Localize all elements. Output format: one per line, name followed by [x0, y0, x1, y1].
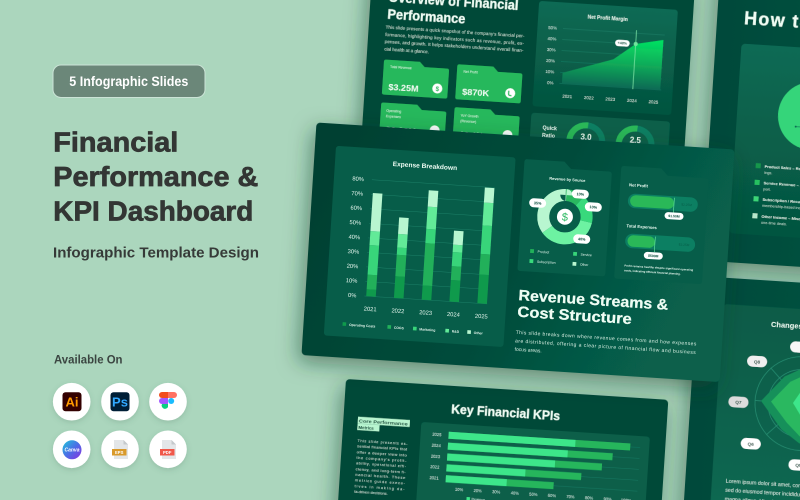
main title: Financial — [53, 126, 178, 157]
main title — [53, 126, 258, 227]
card: total revenue: $3.25M — [388, 83, 419, 94]
panel: net profit margin chart: 10% — [545, 69, 554, 75]
badge: 5 infographic slides: 5 Infographic Slides — [69, 74, 188, 89]
kpi paragraph: ciency, and long-term fi- — [356, 466, 406, 474]
card: operating expenses — [379, 102, 447, 142]
panel: quick ratio gauges: Quick — [542, 125, 557, 132]
card: total revenue: Total Revenue — [390, 65, 412, 70]
donut chart: 40% — [578, 237, 586, 242]
card: net profit — [455, 64, 523, 103]
icon: canva: Canva — [64, 448, 80, 454]
card: yoy growth: (Revenue) — [460, 119, 476, 124]
panel: net profit margin chart — [532, 1, 678, 115]
pie chart — [776, 80, 800, 152]
panel: stacked bar chart of kpis: 40% — [511, 490, 519, 496]
panel: expense breakdown bar chart: 70% — [351, 191, 363, 198]
card: yoy growth — [452, 107, 520, 146]
panel: expense breakdown bar chart: 2021 — [363, 307, 377, 313]
donut chart — [527, 186, 603, 245]
donut chart: $ — [561, 212, 568, 224]
panel: stacked bar chart of kpis: 70% — [566, 494, 575, 500]
panel: stacked bar chart of kpis: 20% — [473, 488, 482, 494]
kpi paragraph — [354, 438, 409, 497]
panel: stacked bar chart of kpis — [414, 422, 650, 500]
donut legend: Subscription — [537, 260, 556, 265]
donut legend — [529, 249, 592, 267]
slide heading: revenue streams and cost structure: Revenue Streams & — [518, 287, 669, 314]
panel: expense breakdown bar chart: 2025 — [475, 314, 488, 321]
panel: expense breakdown bar chart: 0% — [348, 293, 357, 299]
badge: 5 infographic slides — [53, 65, 205, 98]
highlighted subheading: core performance metrics: Core Performance — [359, 418, 409, 426]
panel: stacked bar chart of kpis: 2021 — [429, 475, 440, 481]
panel: net profit and total expenses — [614, 166, 709, 284]
icon: canva — [53, 430, 90, 468]
panel: expense breakdown bar chart: Expense Breakdown — [392, 161, 457, 172]
panel: stacked bar chart of kpis: 2025 — [432, 432, 442, 437]
panel: net profit and total expenses: Total Expenses — [626, 223, 658, 230]
panel: expense breakdown bar chart: 30% — [347, 249, 359, 256]
radar axis labels: Q8 — [754, 359, 761, 364]
panel: revenue by source donut — [517, 159, 612, 276]
overview paragraph: This slide presents a quick snapshot of the company's financial per- — [386, 25, 525, 39]
pie legend: ings. — [764, 171, 772, 176]
expense legend: Marketing — [419, 327, 435, 332]
bar 2023 — [422, 190, 438, 300]
panel: net profit margin chart: 2024 — [627, 98, 637, 103]
panel: expense breakdown bar chart: 2022 — [391, 308, 404, 315]
panel: expense breakdown bar chart: 10% — [346, 278, 357, 285]
donut chart: 10% — [589, 205, 598, 210]
donut chart: 35% — [534, 201, 542, 206]
overview paragraph: penses, and growth. It helps stakeholders understand overall finan- — [385, 39, 524, 53]
revenue paragraph — [514, 330, 697, 364]
panel: expense breakdown bar chart: 50% — [349, 220, 361, 227]
card: operating expenses: Operating — [386, 109, 401, 114]
panel: net profit margin chart: 20% — [546, 58, 555, 64]
slide: revenue streams and cost structure — [301, 122, 735, 382]
overview paragraph — [384, 25, 525, 60]
pie legend — [752, 163, 800, 230]
panel: net profit margin chart: Net Profit Margin — [587, 15, 628, 23]
panel: pie and legend — [729, 44, 800, 245]
panel: net profit and total expenses: $2.25M — [681, 203, 692, 207]
card: net profit: Net Profit — [463, 70, 478, 75]
icon: illustrator: Ai — [66, 394, 78, 410]
expense legend — [342, 322, 484, 336]
panel: stacked bar chart of kpis: 50% — [529, 492, 538, 497]
radar axis labels: Q6 — [748, 441, 754, 447]
slide heading: overview: Performance — [387, 5, 466, 26]
kpi paragraph: metrics guide execu- — [355, 477, 406, 486]
highlighted subheading: core performance metrics: Metrics — [358, 425, 374, 431]
slide heading: revenue streams and cost structure: Cost Structure — [517, 304, 632, 328]
panel: stacked bar chart of kpis: 60% — [548, 493, 557, 498]
card: operating expenses: $2.38M — [385, 126, 416, 137]
revenue paragraph: are distributed, offering a clear picture of financial flow and business — [515, 338, 696, 356]
panel: net profit margin chart: 40% — [547, 36, 557, 42]
panel: net profit margin chart: 0% — [547, 80, 554, 85]
icon: photoshop: Ps — [112, 394, 128, 410]
slide heading: key financial kpis: Key Financial KPIs — [451, 401, 561, 423]
panel: expense breakdown bar chart: 2024 — [447, 312, 461, 319]
bar 2025 — [477, 187, 494, 304]
panel: net profit margin chart: 2022 — [584, 95, 594, 101]
panel: radar chart — [707, 304, 800, 500]
panel: net profit margin chart: 2023 — [605, 96, 616, 102]
card: yoy growth: 12.4% — [459, 131, 484, 141]
panel: expense breakdown bar chart: 40% — [348, 235, 360, 241]
panel: expense breakdown bar chart — [324, 146, 516, 347]
kpi paragraph: This slide presents es- — [357, 438, 408, 446]
kpi paragraph: tives in making da- — [354, 483, 405, 491]
icon: pdf file — [149, 430, 187, 468]
expense legend: Operating Costs — [349, 323, 376, 329]
slide: how to revenue breakdown — [701, 0, 800, 274]
panel: revenue by source donut: Revenue by Source — [549, 176, 586, 183]
slide: changes radar chart — [679, 276, 800, 500]
panel: net profit and total expenses: $2.25M — [679, 243, 690, 247]
panel: net profit margin chart: 50% — [548, 25, 557, 31]
donut legend: Product — [537, 250, 549, 254]
panel: stacked bar chart of kpis: 2024 — [431, 443, 442, 448]
pie legend: one-time deals. — [761, 221, 787, 226]
panel: expense breakdown bar chart: 20% — [346, 264, 358, 270]
radar paragraph — [724, 479, 800, 500]
subtitle: Infographic Template Design — [53, 244, 259, 261]
icon: pdf file: PDF — [163, 450, 172, 455]
panel: stacked bar chart of kpis: 2023 — [431, 453, 441, 459]
panel: stacked bar chart of kpis: 30% — [492, 489, 501, 495]
panel: net profit and total expenses: $500M — [648, 254, 659, 258]
panel: net profit margin chart: 30% — [547, 47, 556, 53]
bar 2022 — [394, 217, 409, 298]
highlighted subheading: core performance metrics — [357, 417, 410, 433]
slide: overview of financial performance — [360, 0, 695, 181]
panel: expense breakdown bar chart: 80% — [352, 176, 364, 183]
panel: net profit margin chart: 2021 — [562, 94, 573, 99]
donut chart: 10% — [576, 192, 585, 197]
bar 2021 — [366, 193, 382, 297]
slide heading: overview — [387, 0, 519, 30]
panel: net profit margin chart: +48% — [618, 41, 628, 46]
panel: stacked bar chart of kpis: 10% — [455, 487, 464, 492]
icon: figma — [149, 383, 187, 421]
kpi paragraph: ta-driven decisions. — [354, 489, 388, 496]
kpi paragraph: offer a deeper view into — [357, 449, 407, 457]
icon: photoshop — [101, 383, 139, 421]
panel: quick ratio gauges: 2.5 — [629, 136, 642, 145]
panel: net profit margin chart: 2025 — [648, 99, 659, 105]
donut legend: Service — [580, 253, 592, 257]
card: operating expenses: Expenses — [386, 114, 401, 119]
revenue paragraph: focus areas. — [514, 347, 542, 355]
slide heading: revenue streams and cost structure — [517, 287, 669, 330]
panel: net profit and total expenses: $1.50M — [668, 214, 680, 219]
panel: quick ratio gauges: Ratio — [542, 133, 555, 140]
card: net profit: $870K — [462, 88, 490, 99]
expense legend: R&D — [452, 329, 460, 334]
radar axis labels — [724, 337, 800, 471]
revenue paragraph: This slide breaks down where revenue comes from and how expenses — [515, 330, 697, 347]
icon: illustrator — [53, 383, 90, 421]
panel: expense breakdown bar chart: 2023 — [419, 310, 432, 317]
kpi paragraph: the company's profit- — [356, 455, 407, 463]
card: total revenue — [382, 60, 449, 99]
card: yoy growth: YoY Growth — [461, 114, 479, 119]
main title: KPI Dashboard — [53, 196, 253, 227]
kpi paragraph: nancial health. These — [355, 472, 405, 480]
icon: eps file: EPS — [115, 450, 124, 455]
pie legend: port. — [763, 187, 771, 192]
slide: key financial kpis — [333, 379, 668, 500]
kpi paragraph: ability, operational effi- — [356, 461, 407, 469]
kpi paragraph: sential financial KPIs that — [357, 444, 408, 452]
main title: Performance & — [53, 161, 258, 192]
panel: net profit and total expenses: Profit remains healthy despite significant operating — [624, 263, 694, 272]
radar axis labels: Q7 — [735, 400, 742, 405]
expense legend: COGS — [394, 326, 405, 330]
bar 2024 — [449, 231, 464, 302]
overview paragraph: formance, highlighting key indicators such as revenue, profit, ex- — [385, 32, 525, 46]
panel: net profit and total expenses: Net Profit — [629, 182, 649, 189]
overview paragraph: cial health at a glance. — [384, 46, 429, 54]
donut legend: Other — [580, 262, 589, 267]
expense legend: Other — [474, 331, 484, 336]
icon: eps file — [101, 430, 139, 468]
panel: quick ratio gauges — [528, 113, 670, 171]
available on label: Available On — [54, 354, 122, 366]
panel: net profit and total expenses: costs, indicating efficient financial planning. — [624, 268, 681, 276]
panel: expense breakdown bar chart: 60% — [350, 205, 362, 212]
panel: stacked bar chart of kpis: 2022 — [430, 464, 440, 470]
card: total revenue: $ — [435, 86, 440, 93]
panel: quick ratio gauges: 3.0 — [580, 132, 592, 142]
